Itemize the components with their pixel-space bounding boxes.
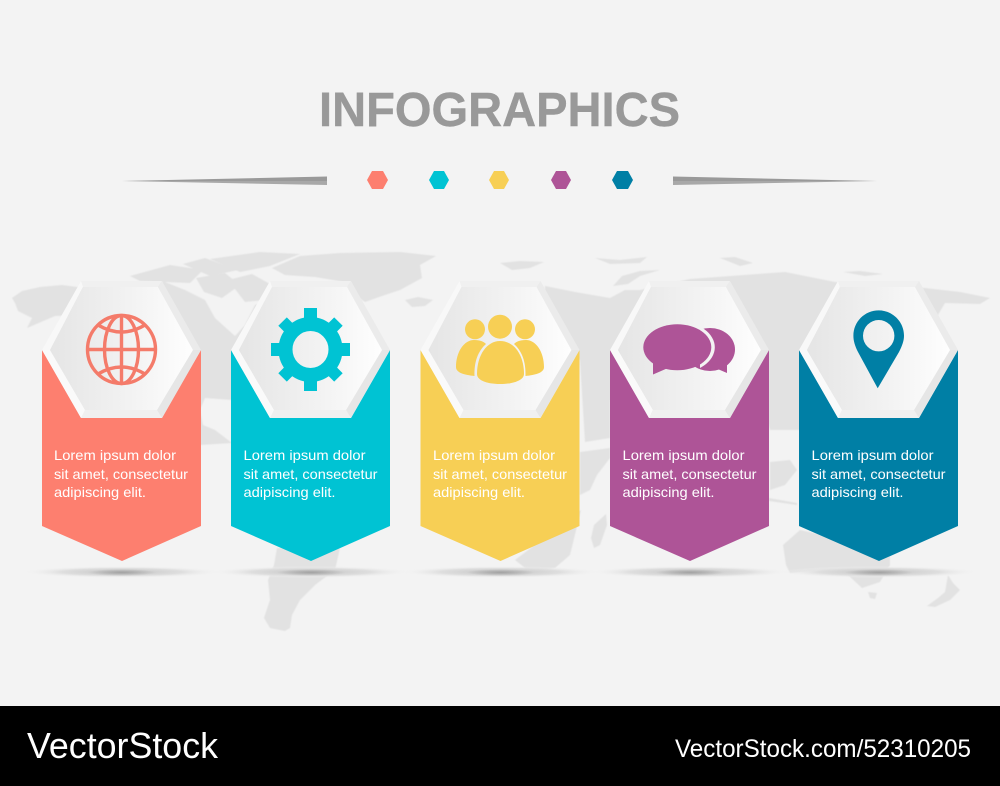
text block: adipiscing elit. <box>244 485 336 500</box>
text block: sit amet, consectetur <box>244 467 378 482</box>
purple banner <box>610 350 769 561</box>
text block: Lorem ipsum dolor <box>433 448 556 463</box>
world map background <box>12 252 990 631</box>
text block: adipiscing elit. <box>622 485 714 500</box>
title: INFOGRAPHICS <box>319 84 680 137</box>
footer brand: VectorStock <box>27 725 219 766</box>
text block: Lorem ipsum dolor <box>622 448 745 463</box>
text block: sit amet, consectetur <box>54 467 189 482</box>
shadow <box>211 566 411 578</box>
shadow <box>590 566 790 578</box>
panel 1: coral globe <box>22 281 222 578</box>
hexagon badge <box>799 281 958 418</box>
right divider line <box>673 176 877 185</box>
left divider line <box>122 176 327 185</box>
icon: speech bubbles <box>640 321 735 374</box>
teal banner <box>231 350 390 561</box>
text block: sit amet, consectetur <box>812 467 946 482</box>
text block: sit amet, consectetur <box>433 467 568 482</box>
text block: adipiscing elit. <box>54 485 146 500</box>
coral banner <box>42 350 201 561</box>
colour hexagon row <box>367 171 633 189</box>
icon: location pin <box>853 310 904 388</box>
panel 5: blue location pin <box>779 281 979 578</box>
text block: Lorem ipsum dolor <box>244 448 366 463</box>
footer image id: VectorStock.com/52310205 <box>675 735 971 763</box>
shadow <box>22 566 222 578</box>
text block: adipiscing elit. <box>812 485 904 500</box>
panel 4: purple chat <box>610 281 769 576</box>
text block: Lorem ipsum dolor <box>812 448 934 463</box>
hexagon badge <box>420 281 580 418</box>
shadow <box>400 566 600 578</box>
panel 3: yellow people <box>400 281 600 578</box>
hexagon badge <box>42 281 201 418</box>
text block: Lorem ipsum dolor <box>54 448 177 463</box>
hexagon badge <box>610 281 769 418</box>
icon: people <box>456 315 544 384</box>
panel 2: teal gear <box>211 281 411 578</box>
icon: gear <box>271 308 350 391</box>
blue banner <box>799 350 958 561</box>
footer bar <box>0 706 1000 786</box>
hexagon badge <box>231 281 390 418</box>
text block: sit amet, consectetur <box>622 467 757 482</box>
shadow <box>779 566 979 578</box>
icon: globe <box>88 315 156 384</box>
yellow banner <box>420 350 580 561</box>
text block: adipiscing elit. <box>433 485 525 500</box>
